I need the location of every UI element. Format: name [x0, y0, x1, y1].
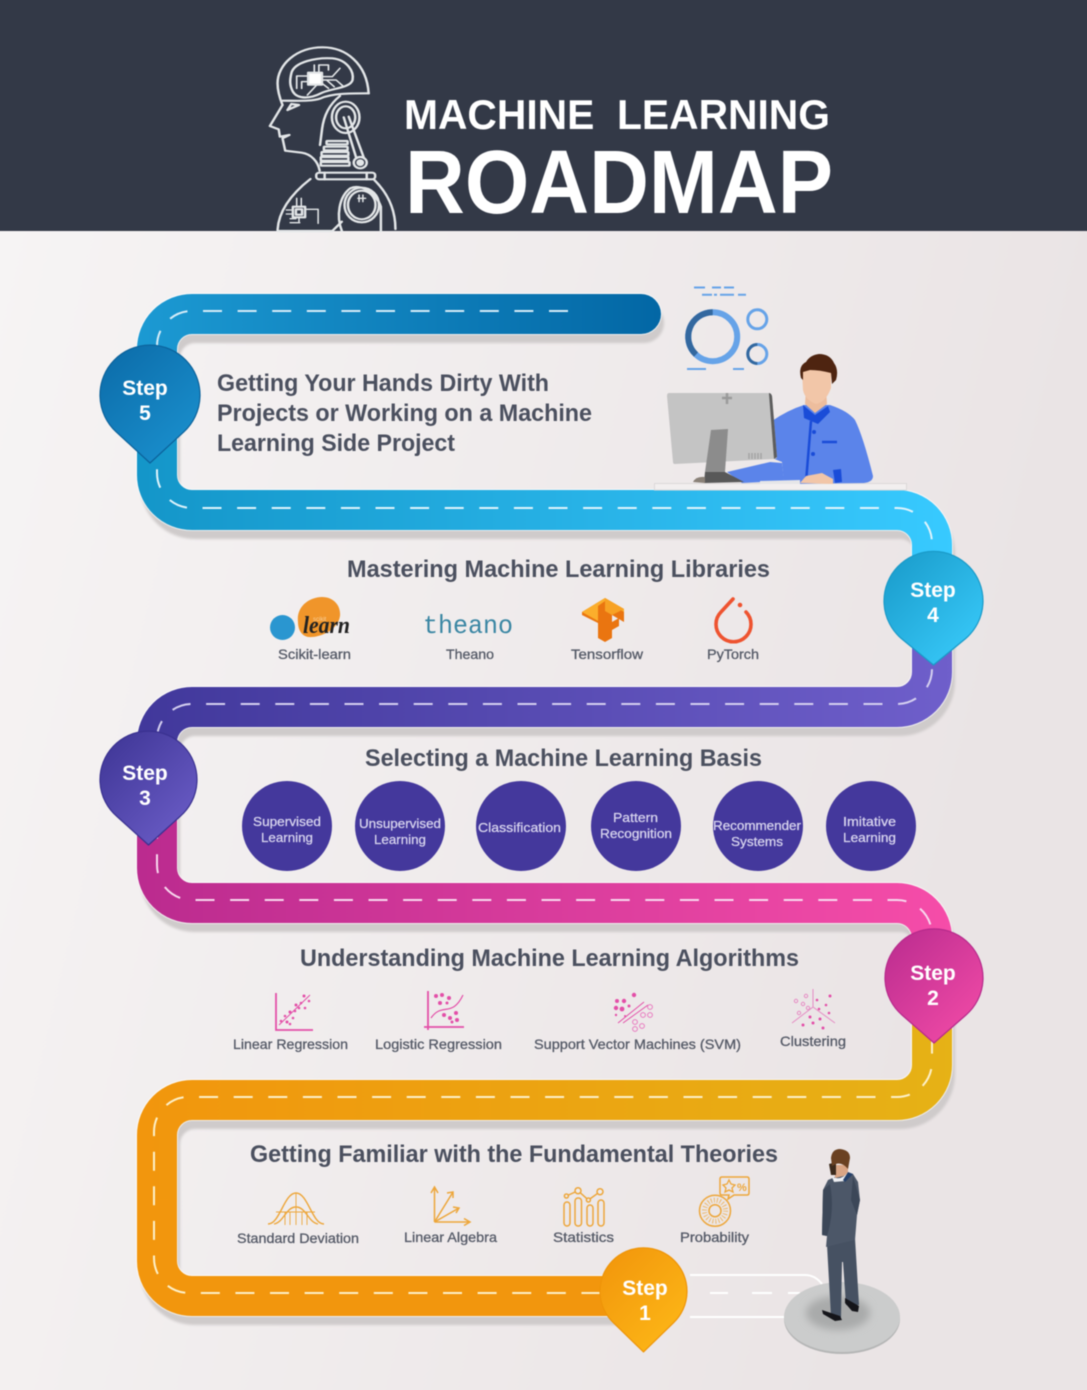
circle: pattern recognition: Pattern [613, 810, 658, 825]
road edge highlight [157, 314, 932, 1296]
pin: step 5: 5 [139, 402, 151, 425]
title [404, 91, 833, 233]
pin: step 2 [885, 929, 983, 1043]
circle: recommender systems [713, 781, 803, 871]
pin: step 3: 3 [139, 787, 151, 810]
label: Tensorflow: Tensorflow [571, 646, 644, 662]
heading: basis: Selecting a Machine Learning Basis [365, 745, 762, 772]
label: Scikit-learn: Scikit-learn [278, 646, 351, 662]
heading: theories: Getting Familiar with the Fundamental Theories [250, 1141, 778, 1168]
pin: step 1: 1 [639, 1302, 651, 1325]
pin: step 4 [884, 551, 983, 665]
icon: linear regression [276, 993, 313, 1030]
circle: imitative learning [826, 781, 916, 871]
logo: theano: theano [423, 611, 513, 641]
label: logistic regression: Logistic Regression [375, 1036, 502, 1052]
circle: imitative learning: Learning [843, 830, 896, 845]
title line one: MACHINE LEARNING [404, 91, 830, 138]
icon: clustering [792, 989, 835, 1030]
icon: linear algebra [431, 1187, 470, 1226]
pin: step 4: 4 [927, 604, 939, 627]
pin: step 3: Step [122, 762, 168, 785]
logo: tensorflow [582, 598, 624, 642]
circle: unsupervised learning [355, 781, 445, 871]
text block: step 5 description [217, 370, 592, 457]
label: clustering: Clustering [780, 1033, 846, 1049]
road segment: step 5 top [157, 314, 641, 400]
label: probability: Probability [680, 1229, 749, 1245]
road centre dashes [154, 311, 932, 1293]
pin: step 5 [100, 345, 200, 463]
person [727, 354, 873, 484]
circle: unsupervised learning: Learning [374, 832, 426, 847]
heading: libraries: Mastering Machine Learning Libraries [347, 556, 770, 583]
label: standard deviation: Standard Deviation [237, 1230, 359, 1246]
library logos [270, 597, 759, 662]
circle: recommender systems: Recommender [713, 818, 802, 833]
title line two: ROADMAP [405, 133, 833, 233]
circle: classification: Classification [478, 820, 561, 835]
theory icons [237, 1177, 749, 1246]
learning type circles [242, 781, 916, 871]
text block: step 5 description: Getting Your Hands Dirty With [217, 370, 549, 397]
road segment: step 5 to step 4 [157, 400, 932, 600]
road segment: step 1 lower [157, 1200, 645, 1296]
pin: step 4: Step [910, 579, 956, 602]
pin: step 3 [100, 731, 197, 845]
icon: probability [700, 1177, 749, 1226]
illustration: businessman on platform [784, 1149, 900, 1354]
platform [784, 1282, 900, 1354]
computer monitor [667, 393, 777, 483]
road segment: step 2 to step 1 upper [157, 980, 932, 1200]
businessman [822, 1149, 860, 1321]
circle: classification [476, 781, 566, 871]
algorithm icons [233, 989, 846, 1052]
icon: robot head and shoulders [270, 47, 395, 231]
circle: pattern recognition: Recognition [600, 826, 672, 841]
label: PyTorch: PyTorch [707, 646, 759, 662]
desk [654, 484, 906, 490]
circle: recommender systems: Systems [731, 834, 784, 849]
circle: supervised learning: Learning [261, 830, 313, 845]
label: Theano: Theano [446, 646, 494, 662]
circle: pattern recognition [591, 781, 681, 871]
text block: step 5 description: Learning Side Project [217, 430, 455, 457]
pin: step 1 [600, 1248, 687, 1352]
pin: step 2: 2 [927, 987, 939, 1010]
road segment: step 3 to step 2 [157, 785, 932, 980]
icon: support vector machines [614, 993, 652, 1031]
icon: standard deviation [268, 1193, 324, 1225]
label: statistics: Statistics [553, 1229, 614, 1245]
logo: pytorch [716, 599, 751, 642]
unfinished road outline to the figure [690, 1275, 822, 1317]
header banner [0, 0, 1087, 233]
logo: scikit-learn: scikit [313, 617, 327, 623]
chart decoration [687, 288, 767, 369]
label: linear algebra: Linear Algebra [404, 1229, 497, 1245]
icon: statistics [564, 1188, 604, 1226]
illustration: person at computer [654, 288, 906, 490]
pin: step 1: Step [622, 1277, 668, 1300]
icon: logistic regression [424, 991, 464, 1030]
heading: algorithms: Understanding Machine Learning Algorithms [300, 945, 799, 972]
circle: imitative learning: Imitative [843, 814, 896, 829]
label: linear regression: Linear Regression [233, 1036, 348, 1052]
pin: step 2: Step [910, 962, 956, 985]
logo: scikit-learn: learn [303, 613, 350, 639]
logo: scikit-learn [270, 597, 350, 640]
road segment: step 4 to step 3 [157, 600, 932, 785]
icon: probability: % [737, 1182, 747, 1194]
circle: unsupervised learning: Unsupervised [359, 816, 441, 831]
circle: supervised learning: Supervised [253, 814, 321, 829]
label: support vector machines: Support Vector Machines (SVM) [534, 1036, 741, 1052]
road shadow [160, 323, 935, 1305]
pin: step 5: Step [122, 377, 168, 400]
circle: supervised learning [242, 781, 332, 871]
text block: step 5 description: Projects or Working on a Machine [217, 400, 592, 427]
